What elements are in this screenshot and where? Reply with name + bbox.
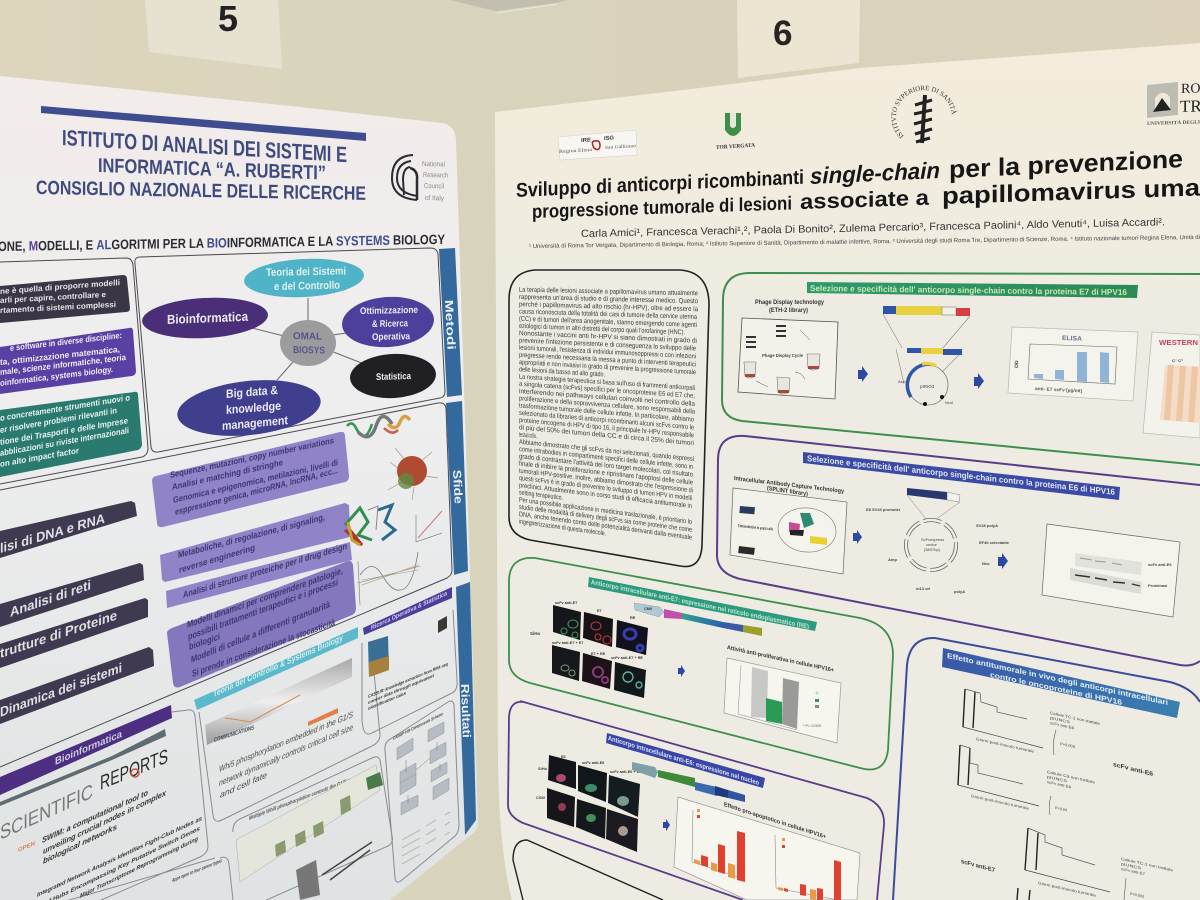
panel: abstract: Abbiamo dimostrato che gli scFvs da noi selezionati, quando espressi — [519, 439, 694, 463]
bar: Analisi di DNA e RNA — [0, 501, 137, 558]
ELISA chart — [1008, 327, 1138, 401]
box: Analisi di strutture — [166, 540, 352, 608]
microscopy E7 — [530, 601, 648, 698]
vector map E6: m13 ori — [916, 586, 930, 591]
banner: antitumor effect: Effetto antitumorale in vivo degli anticorpi intracellulari — [947, 651, 1168, 707]
panel: abstract: come intrabodies in compartimenti specifici delle cellule infette, sono in — [519, 446, 693, 471]
node: Ottimizzazione: Operativa — [372, 331, 411, 343]
article: Nature Communications: COMMUNICATIONS — [214, 724, 254, 744]
panel: abstract: proliferazione e della sopravvivenza cellulare, sono responsabili della — [519, 395, 695, 416]
poster 6 title: associate a — [800, 186, 930, 214]
node: OMAL BIOSYS: BIOSYS — [293, 345, 325, 357]
wall corner and ceiling — [450, 0, 567, 13]
survival chart 3 — [1025, 828, 1173, 900]
box: Sequenze: esppressione genica, microRNA, lncRNA, ecc... — [175, 465, 338, 517]
mission box dark: rtamento di sistemi complessi — [0, 300, 116, 315]
article: Scientific Reports: SCIENTIFIC — [0, 780, 93, 845]
node: Bioinformatica — [141, 295, 269, 341]
node: Ottimizzazione: Ottimizzazione — [360, 305, 418, 317]
node: OMAL BIOSYS — [280, 320, 336, 366]
SPLINT diagram: Intracellular Antibody Capture Technology — [734, 476, 845, 495]
panel: abstract: a singola catena (scFvs) specifici per le oncoproteine E6 ed E7 che, — [519, 381, 695, 400]
vector map E6: E8 SV40 promoter — [866, 507, 901, 512]
banner: Teoria del Controllo: Teoria del Controllo & Systems Biology — [213, 631, 344, 699]
banner: Teoria del Controllo — [194, 627, 358, 710]
article: CASSUR: classification rules — [368, 690, 406, 711]
arrow — [998, 553, 1008, 569]
panel: abstract: causa riconosciuta della totalità dei casi di tumore della cervice uterina — [519, 308, 697, 321]
vector map E6: EF46 selectable — [979, 540, 1010, 545]
article: Scientific Reports — [0, 745, 202, 900]
challenge bars — [0, 501, 154, 724]
node: Statistica: Statistica — [376, 371, 412, 383]
phage display diagram: Phage Display technology — [755, 300, 825, 306]
poster 5 title: ISTITUTO DI ANALISI DEI SISTEMI E — [62, 125, 347, 167]
bar: Analisi di reti — [0, 563, 144, 627]
ELISA chart: ELISA — [1062, 335, 1082, 343]
survival chart 1: scFv anti-E6 — [1050, 721, 1074, 730]
node: Ottimizzazione: & Ricerca — [372, 318, 409, 330]
vector map E6: SV28 polyA — [976, 523, 998, 528]
vector map E6: ScFvexpress — [921, 537, 944, 542]
panel: intracellular E6 — [508, 701, 884, 900]
vector map E7: Ascl — [898, 379, 906, 384]
gel blots — [1042, 524, 1180, 617]
logo: Istituto Superiore di Sanità: ISTITVTO SVPERIORE DI SANITÀ — [891, 86, 958, 139]
panel: abstract: selezionato da libraries di anticorpi ricombinanti alcuni scFvs contro le — [519, 410, 694, 432]
box: Metaboliche — [160, 503, 350, 582]
box: Sequenze: Analisi e matching di stringhe — [172, 457, 283, 492]
panel: abstract: studio delle modalità di delivery degli scFvs sia come proteine che come — [519, 504, 692, 534]
box: Modelli dinamici: Modelli dinamici per comprendere patologie, — [187, 566, 343, 631]
panel: abstract: grado di contrastare l'attività dei loro target molecolari, col risultato — [519, 453, 693, 479]
box: Modelli dinamici — [167, 561, 356, 688]
figure: CABGP components — [393, 711, 450, 864]
panel: abstract: DNA, anche tenendo conto delle potenzialità derivanti dalla eventuale — [519, 511, 692, 542]
microscopy E7: scFv anti-E7 + RE — [611, 656, 643, 660]
article: Nature Communications — [205, 658, 353, 800]
box: Metaboliche: Metaboliche, di regolazione, di signaling, — [178, 512, 325, 560]
banner: E7 selection: Selezione e specificità dell' anticorpo single-chain contro la proteina E7 di HPV16 — [810, 283, 1127, 297]
mission box teal — [0, 392, 142, 477]
panel: E6 selection — [717, 436, 1200, 666]
figure: Whi5 network: Multiple Whi5 phosphorylation controls the G1/S transition — [249, 771, 367, 822]
vector map E6: Amp — [888, 557, 897, 562]
mission box teal: on alto impact factor — [0, 445, 80, 469]
box: Sequenze: Genomica e epigenomica, metilazioni, livelli di — [173, 457, 338, 505]
antiproliferative chart — [724, 645, 841, 743]
logo: Tor Vergata — [716, 113, 755, 151]
poster 6 affiliations: ¹ Università di Roma Tor Vergata, Dipartimento di Biologia, Roma; ² Istituto Superiore di Sanità, Dipartimento di malattie infettive, Roma. ³ Università degli studi Roma Tre, Dipartimento di Scienze, Roma. ⁴ Istituto nazionale tumori Regina Elena, Unità di — [529, 234, 1200, 250]
poster 5 title: CONSIGLIO NAZIONALE DELLE RICERCHE — [36, 177, 366, 205]
logo: Tor Vergata: TOR VERGATA — [716, 143, 755, 151]
gel blots: Proteinasi — [1148, 583, 1167, 588]
article: Nature Communications: network dynamically controls critical cell size — [219, 722, 353, 788]
bar: Strutture di Proteine — [0, 598, 148, 668]
Western blot — [1143, 332, 1200, 438]
mind map — [141, 256, 437, 442]
vector map E7: NcoI — [945, 400, 953, 405]
bar: Analisi di DNA e RNA: lisi di DNA e RNA — [0, 511, 105, 556]
survival chart 1: Cellule TC-1 non trattate — [1050, 711, 1100, 726]
poster 6 title: per la prevenzione — [949, 145, 1183, 184]
panel: intracellular E7 — [509, 558, 893, 770]
panel: abstract: preclinici. Attualmente sono in corso studi di efficacia antitumorale in — [519, 482, 692, 510]
mission box purple: male, scienze informatiche, teoria — [0, 352, 126, 377]
mission box purple — [0, 328, 136, 394]
panel: abstract: lesioni tumorali, l'esistenza di individui immunosoppressi o con infezioni — [519, 345, 696, 360]
box: Modelli dinamici: possibili trattamenti terapeutici e i processi — [188, 577, 338, 643]
banner: Bioinformatica: Bioinformatica — [55, 728, 123, 768]
panel: abstract: tumorali HPV-positive. Inoltre, abbiamo dimostrato che l'espressione di — [519, 468, 693, 495]
survival chart 2: scFv anti-E6 — [1047, 780, 1071, 789]
scatter plot — [416, 515, 442, 542]
node: OMAL BIOSYS: OMAL — [293, 331, 322, 343]
panel: abstract: Per una possibile applicazione in medicina traslazionale, è prioritario lo — [519, 497, 692, 526]
microscopy E7: RE — [630, 616, 636, 620]
article: Nature Communications: Whi5 phosphorylation embedded in the G1/S — [219, 709, 353, 774]
box: Analisi di strutture: Analisi di strutture proteiche per il drug design — [183, 540, 347, 600]
gel blots: scFv anti-E6 — [1148, 562, 1172, 567]
box: Sequenze: Sequenze, mutazioni, copy number variations — [170, 435, 334, 480]
card: number 5 — [145, 0, 282, 69]
node: Big data: Big data & — [226, 383, 278, 401]
survival chart 3: scFv anti-E7 — [1121, 867, 1145, 876]
phage display diagram — [738, 300, 838, 399]
banner: Ricerca Operativa: Ricerca Operativa & Statistica — [371, 590, 447, 632]
images: molecules and graphs — [345, 416, 442, 605]
survival chart 1 — [963, 689, 1100, 755]
Scientific Reports grey bar — [0, 729, 166, 806]
bar: Strutture di Proteine: trutture di Proteine — [0, 607, 117, 661]
panel: abstract: La terapia delle lesioni associate a papillomavirus umano attualmente — [519, 287, 698, 297]
survival chart 3: pIUNCS — [1121, 862, 1142, 871]
microscopy E7: scFv anti-E7 + E7 — [552, 641, 583, 645]
panel: abstract: rappresenta un'area di studio e di grande interesse medico. Questo — [519, 294, 698, 305]
panel: abstract: prevenire l'infezione persistente e di conseguenza lo sviluppo delle — [519, 337, 696, 353]
node: Big data: management — [222, 413, 288, 433]
survival chart 2: P=0,04 — [1055, 806, 1068, 813]
banner: intracellular E7: Anticorpo intracellulare anti-E7: espressione nel reticolo endoplasmatico (RE) — [591, 579, 809, 631]
microscopy E6: scFv anti-E6 + E6 — [610, 770, 641, 774]
panel: abstract: trasformazione tumorale delle cellule infette. In particolare, abbiamo — [519, 403, 694, 424]
article: Scientific Reports: SWIM: a computational tool to — [42, 787, 148, 845]
mission box teal: abblicazioni su riviste internazionali — [0, 425, 129, 458]
poster 5 title — [36, 125, 366, 205]
poster 6 title: single-chain — [810, 157, 940, 189]
results panel outlines — [0, 610, 459, 900]
node: Teoria dei Sistemi — [243, 256, 365, 300]
logo: Roma Tre: UNIVERSITÀ DEGLI — [1147, 119, 1200, 127]
box: Sequenze — [152, 432, 349, 527]
survival chart 2: Cellule C3 non trattate — [1047, 770, 1095, 785]
construct E7: CMV — [644, 607, 653, 611]
survival chart 1: P=0,003 — [1060, 742, 1075, 749]
panel outlines — [0, 248, 452, 767]
apoptosis chart: Effetto pro-apoptotico in cellule HPV16+ — [724, 802, 826, 841]
article: CASSUR: cancer data through equivalent — [368, 673, 434, 705]
logo: IRE ISG — [558, 130, 637, 160]
panel: abstract: delle lesioni da basso ad alto grado. — [519, 366, 605, 379]
panel: abstract: di più del 50% dei tumori della CC e di circa il 25% dei tumori — [519, 424, 694, 447]
panel: abstract: finale di inibire la proliferazione e ripristinare l'apoptosi delle cellule — [519, 461, 693, 487]
article: Scientific Reports: Integrated Network Analysis Identifies Fight-Club Nodes as — [37, 815, 202, 899]
panel: abstract: Nonostante i vaccini anti hr-HPV si siano dimostrati in grado di — [519, 330, 697, 345]
tab: Metodi: Metodi — [442, 300, 457, 350]
article: CASSUR — [368, 616, 448, 711]
card: number 6: 6 — [773, 14, 792, 53]
panel: abstract: La nostra strategia terapeutica si basa sull'uso di frammenti anticorpali — [519, 374, 695, 392]
mission box teal: er risolvere problemi rilevanti in — [0, 405, 117, 435]
tab: Risultati — [456, 582, 476, 835]
poster 6 — [495, 43, 1200, 900]
microscopy E7: scFv anti-E7 — [555, 601, 577, 605]
CNR logo — [392, 155, 448, 202]
card: number 6 — [737, 0, 860, 78]
mission box teal: o concretamente strumenti nuovi o — [0, 392, 130, 423]
panel: abstract: perché i papillomavirus ad alto rischio (hr-HPV), oltre ad essere la — [519, 301, 698, 313]
logo: Roma Tre — [1147, 81, 1200, 127]
vector map E7 — [883, 306, 970, 406]
banner: E6 selection: Selezione e specificità dell' anticorpo single-chain contro la proteina E6 di HPV16 — [807, 453, 1115, 497]
tab: Risultati: Risultati — [458, 684, 472, 738]
panel: abstract: appropriati e non invasivi in grado di prevenire la progressione tumorale — [519, 359, 696, 376]
logo: IRE ISG: Regina Elena — [559, 148, 593, 155]
tab: Sfide: Sfide — [450, 470, 464, 504]
panel: abstract: testa/collo. — [519, 432, 537, 440]
poster 6 sheet — [495, 43, 1200, 900]
CNR logo: National — [422, 161, 445, 168]
poster 5 top bar — [41, 106, 366, 141]
panel: abstract — [509, 270, 709, 567]
banner: antitumor effect — [942, 648, 1180, 718]
article: Scientific Reports: Major Transcriptome Reprogramming during — [80, 835, 198, 900]
article: Scientific Reports: REPORTS — [100, 745, 168, 795]
logo: IRE ISG: San Gallicano — [605, 144, 637, 151]
mission box dark: ne è quella di proporre modelli — [0, 278, 120, 296]
figure: CABGP components: CABGP-HSI Components Scheme — [393, 711, 443, 742]
phage display diagram: Phage Display Cycle — [762, 353, 803, 358]
poster 6 authors: Carla Amici¹, Francesca Verachi¹,², Paola Di Bonito², Zulema Percario³, Francesca Paolini⁴, Aldo Venuti⁴, Luisa Accardi². — [581, 216, 1165, 240]
microscopy E7: E7 + RE — [591, 652, 606, 656]
CNR logo: Council — [424, 183, 444, 190]
construct E6 — [632, 762, 745, 802]
arrow — [663, 819, 670, 831]
microscopy E6: scFv anti-E6 — [582, 761, 604, 765]
protein structure — [345, 505, 395, 545]
poster 5 sheet — [0, 76, 478, 900]
node: Big data — [175, 374, 323, 442]
poster 6 title — [516, 145, 1200, 223]
vector map E6: (5837bp) — [924, 547, 941, 552]
curves plot — [358, 552, 420, 605]
arrow — [974, 373, 984, 389]
label: scFv anti-E7: scFv anti-E7 — [961, 858, 996, 874]
CNR logo: of Italy — [425, 195, 444, 202]
poster 5 heading: ONE, MODELLI, E ALGORITMI PER LA BIOINFORMATICA E LA SYSTEMS BIOLOGY — [0, 232, 445, 254]
mission box purple: e software in diverse discipline: — [10, 330, 122, 353]
panel: abstract: interferendo nei pathways cellulari coinvolti nel controllo della — [519, 388, 695, 408]
article: Scientific Reports: OPEN — [18, 840, 35, 854]
ELISA chart: anti- E7 scFv [µg/ml] — [1035, 386, 1083, 393]
article: Nature Communications: and cell fate — [220, 770, 267, 800]
survival chart 1: Giorni post-inoculo tumorale — [976, 737, 1034, 754]
panel: abstract: eziologici di tumori in altri distretti del corpo quali l'orofaringe (HNC). — [519, 323, 685, 336]
box: Modelli dinamici: Modelli di cellule a differenti granularità — [191, 599, 330, 666]
survival chart 2 — [958, 745, 1095, 815]
arrow — [853, 530, 862, 544]
SPLINT diagram: (SPLINT library) — [767, 486, 808, 498]
mission box dark — [0, 275, 130, 323]
vector map E6: vector — [926, 542, 938, 547]
logo: IRE ISG: ISG — [604, 135, 614, 142]
node: Ottimizzazione — [340, 294, 436, 350]
survival chart 2: pIUNCS — [1047, 775, 1068, 784]
vector map E6: Neo — [982, 561, 990, 566]
challenge boxes — [152, 432, 356, 688]
mission box purple: oinformatica, systems biology. — [0, 364, 113, 388]
panel: abstract: setting terapeutico. — [519, 489, 563, 502]
microscopy E7: SiHa — [530, 631, 541, 636]
ELISA chart: OD — [1014, 360, 1020, 368]
panel: E7 selection — [722, 273, 1200, 465]
figure: Whi5 network — [236, 765, 383, 900]
microscopy E6: SiHa — [538, 766, 548, 771]
SPLINT diagram: Cotransfection in yeast cells — [738, 523, 773, 532]
node: Statistica — [349, 352, 437, 400]
box: Modelli dinamici: Si prende in considerazione la stocasticità — [192, 617, 335, 680]
bar: Analisi di reti: Analisi di reti — [10, 576, 91, 620]
node: Teoria dei Sistemi: e del Controllo — [274, 280, 340, 293]
survival chart 1: pIUNCS — [1050, 716, 1071, 725]
ball network — [388, 448, 438, 500]
survival chart 3: P=0,003 — [1130, 892, 1144, 899]
logo: Roma Tre: RO — [1181, 81, 1200, 97]
node: Teoria dei Sistemi: Teoria dei Sistemi — [266, 265, 346, 279]
panel: abstract: proteine oncogene di HPV di tipo 16, il principale hr-HPV responsabile — [519, 417, 694, 439]
mission box dark: arli per capire, controllare e — [0, 290, 107, 305]
box: Modelli dinamici: biologici — [189, 631, 220, 653]
banner: intracellular E6: Anticorpo intracellulare anti-E6: espressione nel nucleo — [608, 735, 759, 787]
phage display diagram: (ETH-2 library) — [769, 308, 808, 314]
SPLINT diagram — [730, 476, 847, 574]
vector map E6: polyA — [954, 589, 965, 594]
mission box purple: ta, ottimizzazione matematica, — [0, 344, 120, 367]
Western blot: WESTERN — [1159, 340, 1198, 347]
box: Metaboliche: reverse engineering — [179, 542, 255, 575]
vector map E7: pIRIO3 — [920, 384, 935, 389]
poster 6 title: papillomavirus uma — [942, 174, 1200, 210]
panel: abstract: ingegnerizzazione di questa molecole. — [519, 518, 606, 538]
poster 5 title: INFORMATICA “A. RUBERTI” — [98, 155, 326, 185]
poster 5 — [0, 76, 478, 900]
panel: abstract: questi scFvs è in grado di prevenire lo sviluppo di tumori HPV in modelli — [519, 475, 692, 502]
microscopy E6: CSM — [536, 795, 546, 800]
microscopy E7: E7 — [597, 609, 602, 613]
survival charts — [958, 689, 1173, 900]
Western blot: C⁻ C⁺ — [1172, 358, 1183, 363]
article: CASSUR: CASSUR: knowledge extraction from RNA-seq — [368, 661, 448, 699]
construct E7 — [634, 603, 762, 636]
microscopy E6: E6 — [561, 755, 566, 759]
bar: Dinamica dei sistemi: Dinamica dei sistemi — [0, 659, 122, 720]
label: scFv anti-E6: scFv anti-E6 — [1113, 761, 1154, 778]
antiproliferative chart: Attività anti-proliferativa in cellule HPV16+ — [727, 645, 835, 674]
banner: antitumor effect: contro le oncoproteine di HPV16 — [990, 670, 1122, 707]
poster 6 title: Sviluppo di anticorpi ricombinanti — [516, 167, 804, 202]
tab: Metodi — [439, 248, 462, 397]
mission box teal: tione dei Trasporti e delle Imprese — [0, 415, 128, 447]
antiproliferative chart: * P= 0.003 — [803, 724, 821, 728]
vector map E6 — [866, 488, 1010, 594]
poster 6 title: progressione tumorale di lesioni — [532, 193, 792, 223]
CNR logo: Research — [423, 172, 448, 180]
survival chart 3: Cellule TC-1 non trattate — [1121, 857, 1173, 872]
second row articles: Apps open to four cancer types — [171, 858, 222, 884]
survival chart 3: Giorni post-inoculo tumorale — [1038, 881, 1096, 898]
node: Bioinformatica: Bioinformatica — [167, 309, 249, 327]
survival chart 2: Giorni post-inoculo tumorale — [971, 794, 1029, 811]
apoptosis chart — [674, 797, 860, 900]
panel: bottom black — [513, 840, 663, 900]
tab: Sfide — [446, 401, 468, 575]
article: Scientific Reports: unveiling crucial nodes in complex — [43, 788, 166, 856]
arrow — [858, 366, 868, 382]
arrow — [678, 665, 685, 677]
node: Big data: knowledge — [226, 399, 281, 417]
helix molecule — [347, 416, 410, 437]
logo: IRE ISG: IRE — [581, 137, 591, 144]
article: Scientific Reports: biological networks — [43, 821, 117, 866]
panel: antitumor effect — [893, 638, 1200, 900]
banner: Bioinformatica — [0, 705, 172, 795]
microscopy E6 — [536, 755, 641, 852]
survival chart 4 — [1017, 888, 1030, 900]
panel: abstract: (CC) e di tumori dell'area anogenitale, stanno emergendo come agenti — [519, 316, 697, 329]
panel: abstract: pregresse rende necessaria la messa a punto di interventi terapeutici — [519, 352, 696, 368]
